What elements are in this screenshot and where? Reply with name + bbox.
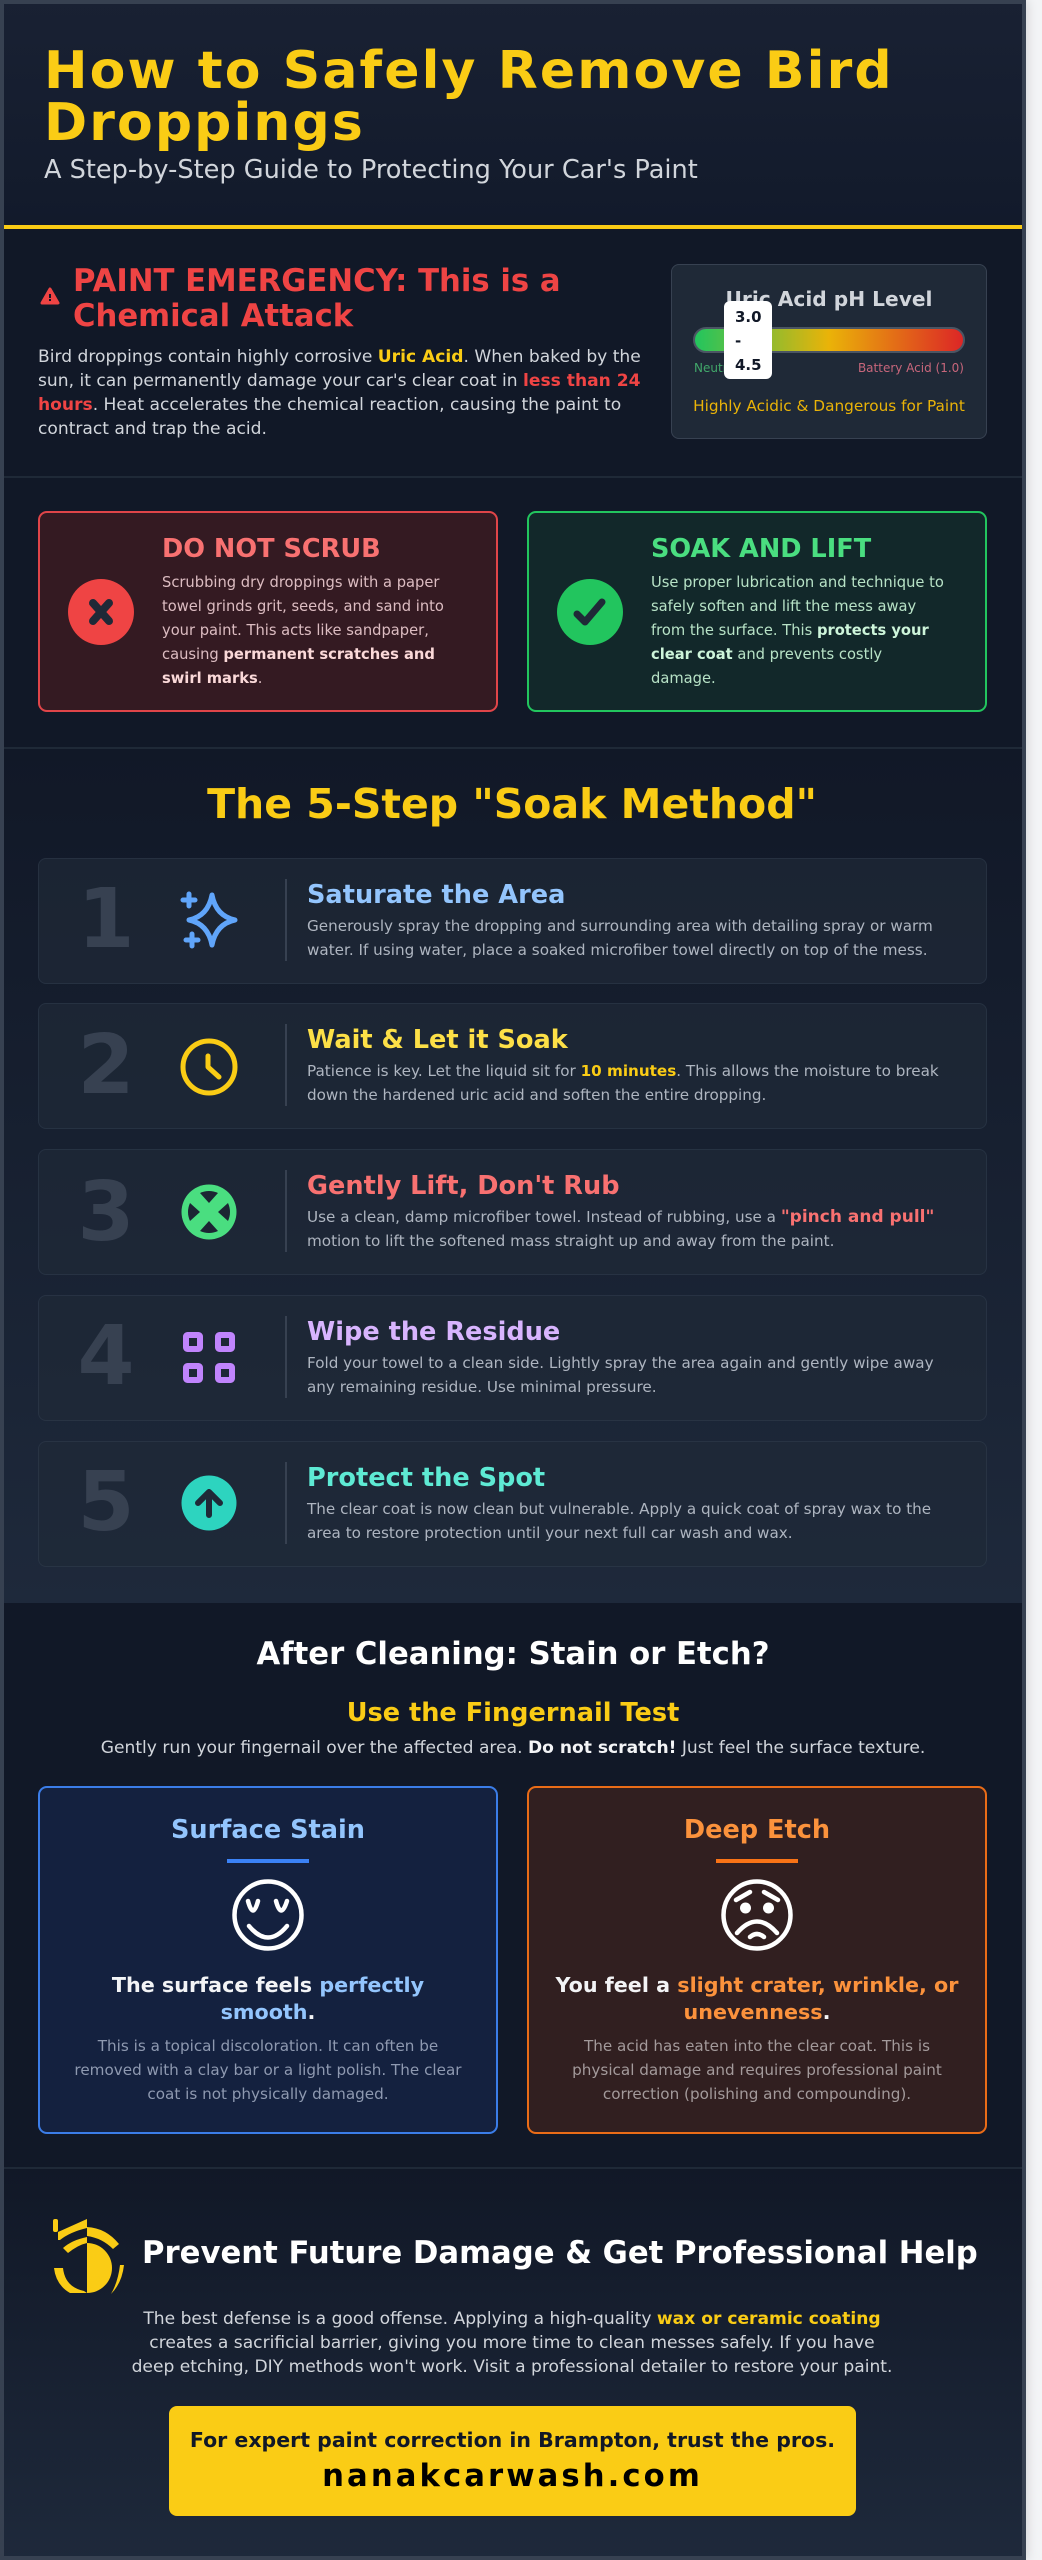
cta text: For expert paint correction in Brampton, trust the pros. <box>190 2428 835 2452</box>
divider <box>0 476 1026 478</box>
card text: swirl marks. <box>162 670 262 687</box>
section heading: The 5-Step "Soak Method" <box>207 780 817 828</box>
gauge label: battery acid: Battery Acid (1.0) <box>858 361 964 375</box>
icon: sparkles <box>180 892 238 948</box>
emergency text: Bird droppings contain highly corrosive Uric Acid. When baked by the <box>38 347 641 367</box>
marker value: 4.5 <box>735 356 762 374</box>
footer text: deep etching, DIY methods won't work. Visit a professional detailer to restore your paint. <box>132 2357 892 2377</box>
emergency text: sun, it can permanently damage your car's clear coat in less than 24 <box>38 371 641 391</box>
card: soak and lift <box>527 511 987 712</box>
card text: from the surface. This protects your <box>651 622 929 639</box>
title: How to Safely Remove Bird <box>44 41 894 101</box>
step title: Gently Lift, Don't Rub <box>307 1171 620 1201</box>
marker value: - <box>735 332 741 350</box>
number: 4 <box>77 1309 135 1404</box>
card text: your paint. This acts like sandpaper, <box>162 622 429 639</box>
card title: Deep Etch <box>684 1815 830 1845</box>
step text: down the hardened uric acid and soften the entire dropping. <box>307 1086 766 1104</box>
marker value: 3.0 <box>735 308 762 326</box>
card title: SOAK AND LIFT <box>651 534 871 564</box>
divider <box>285 1316 286 1398</box>
step title: Saturate the Area <box>307 880 565 910</box>
card text <box>651 574 944 687</box>
step 3 <box>38 1149 987 1275</box>
number: 2 <box>77 1018 135 1113</box>
step text: motion to lift the softened mass straight up and away from the paint. <box>307 1232 834 1250</box>
card statement <box>555 1973 958 2024</box>
panel: paint emergency <box>0 229 1026 476</box>
card text: safely soften and lift the mess away <box>651 598 916 615</box>
icon: check <box>557 579 623 645</box>
gauge label: neutral: Neutral (7.0) <box>694 361 771 375</box>
gauge caption: Highly Acidic & Dangerous for Paint <box>693 397 965 415</box>
gauge marker <box>724 301 772 379</box>
footer text <box>132 2309 892 2377</box>
step title: Wait & Let it Soak <box>307 1025 568 1055</box>
emergency heading <box>73 264 561 334</box>
emergency text <box>38 347 641 439</box>
divider <box>285 1462 286 1544</box>
number: 1 <box>77 872 135 967</box>
section heading: After Cleaning: Stain or Etch? <box>256 1637 770 1672</box>
emergency heading: Chemical Attack <box>73 299 353 334</box>
card statement: unevenness. <box>684 2000 830 2024</box>
card text: coat is not physically damaged. <box>147 2085 389 2103</box>
card text: damage. <box>651 670 716 687</box>
card title: Surface Stain <box>171 1815 365 1845</box>
card text: causing permanent scratches and <box>162 646 435 663</box>
step text <box>306 1500 931 1542</box>
card text: removed with a clay bar or a light polish. The clear <box>74 2061 462 2079</box>
divider <box>285 1024 286 1106</box>
title <box>44 41 894 153</box>
step text <box>307 1207 934 1250</box>
number: 5 <box>77 1455 135 1550</box>
sub heading: Use the Fingernail Test <box>347 1698 679 1728</box>
icon: arrow up circle <box>182 1476 236 1530</box>
step text: Use a clean, damp microfiber towel. Instead of rubbing, use a "pinch and pull" <box>307 1207 934 1227</box>
divider <box>285 879 286 961</box>
step 1 <box>38 858 987 984</box>
divider <box>0 2167 1026 2169</box>
divider <box>0 747 1026 749</box>
accent rule <box>227 1859 309 1863</box>
icon: clock <box>180 1038 238 1096</box>
step text: Patience is key. Let the liquid sit for 10 minutes. This allows the moisture to break <box>307 1062 939 1080</box>
divider <box>285 1170 286 1252</box>
accent rule <box>716 1859 798 1863</box>
card text <box>572 2037 942 2103</box>
emergency text: contract and trap the acid. <box>38 419 267 439</box>
icon: smiling face <box>232 1879 304 1951</box>
icon: sun emblem <box>53 2219 124 2294</box>
title: Droppings <box>44 93 365 153</box>
card statement: You feel a slight crater, wrinkle, or <box>556 1973 958 1997</box>
step title: Protect the Spot <box>307 1463 545 1493</box>
panel: do / don't <box>0 478 1026 747</box>
card: do not scrub <box>38 511 498 712</box>
cta url: nanakcarwash.com <box>322 2459 703 2494</box>
icon: worried face <box>721 1879 793 1951</box>
emergency heading: PAINT EMERGENCY: This is a <box>73 264 561 299</box>
step text: water. If using water, place a soaked microfiber towel directly on top of the mess. <box>307 941 928 959</box>
marker value <box>735 308 762 374</box>
card statement: smooth. <box>221 2000 315 2024</box>
card text: correction (polishing and compounding). <box>603 2085 911 2103</box>
card text: The acid has eaten into the clear coat. This is <box>584 2037 930 2055</box>
card text: clear coat and prevents costly <box>651 646 882 663</box>
step text <box>307 1354 934 1396</box>
card text <box>162 574 444 687</box>
footer text: creates a sacrificial barrier, giving you more time to clean messes safely. If you have <box>149 2333 875 2353</box>
gauge title: Uric Acid pH Level <box>726 287 932 311</box>
footer heading: Prevent Future Damage & Get Professional Help <box>142 2236 978 2271</box>
panel: stain or etch <box>0 1603 1026 2167</box>
step text <box>307 1062 939 1104</box>
step text: any remaining residue. Use minimal pressure. <box>307 1378 657 1396</box>
card text <box>74 2037 462 2103</box>
icon: cross <box>68 579 134 645</box>
icon: warning triangle <box>40 287 60 304</box>
step text: Fold your towel to a clean side. Lightly spray the area again and gently wipe away <box>307 1354 934 1372</box>
step 4 <box>38 1295 987 1421</box>
step title: Wipe the Residue <box>307 1317 560 1347</box>
card text: Scrubbing dry droppings with a paper <box>162 574 439 591</box>
card text: towel grinds grit, seeds, and sand into <box>162 598 444 615</box>
number: 3 <box>77 1165 135 1260</box>
card text: physical damage and requires professional paint <box>572 2061 942 2079</box>
header panel <box>0 0 1026 225</box>
step 5 <box>38 1441 987 1567</box>
step text: area to restore protection until your next full car wash and wax. <box>307 1524 793 1542</box>
gauge bar <box>693 327 965 353</box>
card statement <box>112 1973 424 2024</box>
footer text: The best defense is a good offense. Applying a high-quality wax or ceramic coating <box>143 2309 881 2329</box>
header accent line <box>0 225 1026 229</box>
call to action <box>169 2406 856 2516</box>
panel: pH gauge <box>671 264 987 439</box>
step text <box>307 917 933 959</box>
card text: This is a topical discoloration. It can often be <box>98 2037 438 2055</box>
step 2 <box>38 1003 987 1129</box>
card statement: The surface feels perfectly <box>112 1973 424 1997</box>
subtitle: A Step-by-Step Guide to Protecting Your Car's Paint <box>44 155 698 185</box>
panel: footer <box>0 2169 1026 2560</box>
panel: five step method <box>0 749 1026 1603</box>
icon: four squares <box>183 1332 235 1383</box>
card: deep etch <box>527 1786 987 2134</box>
icon: crossed circle <box>182 1184 236 1240</box>
card text: Use proper lubrication and technique to <box>651 574 944 591</box>
emergency text: hours. Heat accelerates the chemical reaction, causing the paint to <box>38 395 621 415</box>
instruction text: Gently run your fingernail over the affected area. Do not scratch! Just feel the surface texture. <box>101 1738 925 1758</box>
step text: The clear coat is now clean but vulnerable. Apply a quick coat of spray wax to the <box>307 1500 931 1518</box>
card title: DO NOT SCRUB <box>162 534 381 564</box>
card: surface stain <box>38 1786 498 2134</box>
step text: Generously spray the dropping and surrounding area with detailing spray or warm <box>307 917 933 935</box>
